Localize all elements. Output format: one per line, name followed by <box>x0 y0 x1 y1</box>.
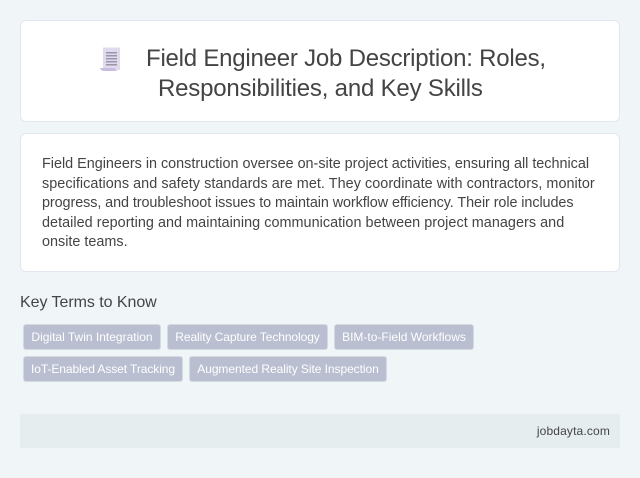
tag <box>189 356 387 382</box>
tag <box>334 324 474 350</box>
text block: description: detailed reporting and maintaining communication between project managers and <box>42 214 564 230</box>
panel: title card <box>20 20 620 122</box>
text block: description: progress, and troubleshoot issues to maintain workflow efficiency. Their role includes <box>42 195 573 211</box>
tag <box>23 324 161 350</box>
icon: document scroll <box>100 48 120 71</box>
tag group: key terms <box>23 324 474 382</box>
footer bar <box>20 414 620 448</box>
text block: description <box>42 156 595 250</box>
text block: description: specifications and safety standards are met. They coordinate with contractors, monitor <box>42 176 595 192</box>
tag <box>167 324 328 350</box>
heading: key terms: Key Terms to Know <box>20 294 157 311</box>
panel: description card <box>20 133 620 272</box>
tag <box>23 356 183 382</box>
title: Field Engineer Job Description: Roles, <box>146 45 546 72</box>
text block: description: Field Engineers in construction oversee on-site project activities, ensuring all technical <box>42 156 589 172</box>
footer text: source: jobdayta.com <box>537 424 610 438</box>
tag: Reality Capture Technology <box>175 330 320 344</box>
tag: Augmented Reality Site Inspection <box>197 362 379 376</box>
title: Responsibilities, and Key Skills <box>158 74 483 102</box>
text block: description: onsite teams. <box>42 234 128 250</box>
title <box>146 45 546 102</box>
tag: Digital Twin Integration <box>31 330 153 344</box>
tag: IoT-Enabled Asset Tracking <box>31 362 175 376</box>
tag: BIM-to-Field Workflows <box>342 330 466 344</box>
